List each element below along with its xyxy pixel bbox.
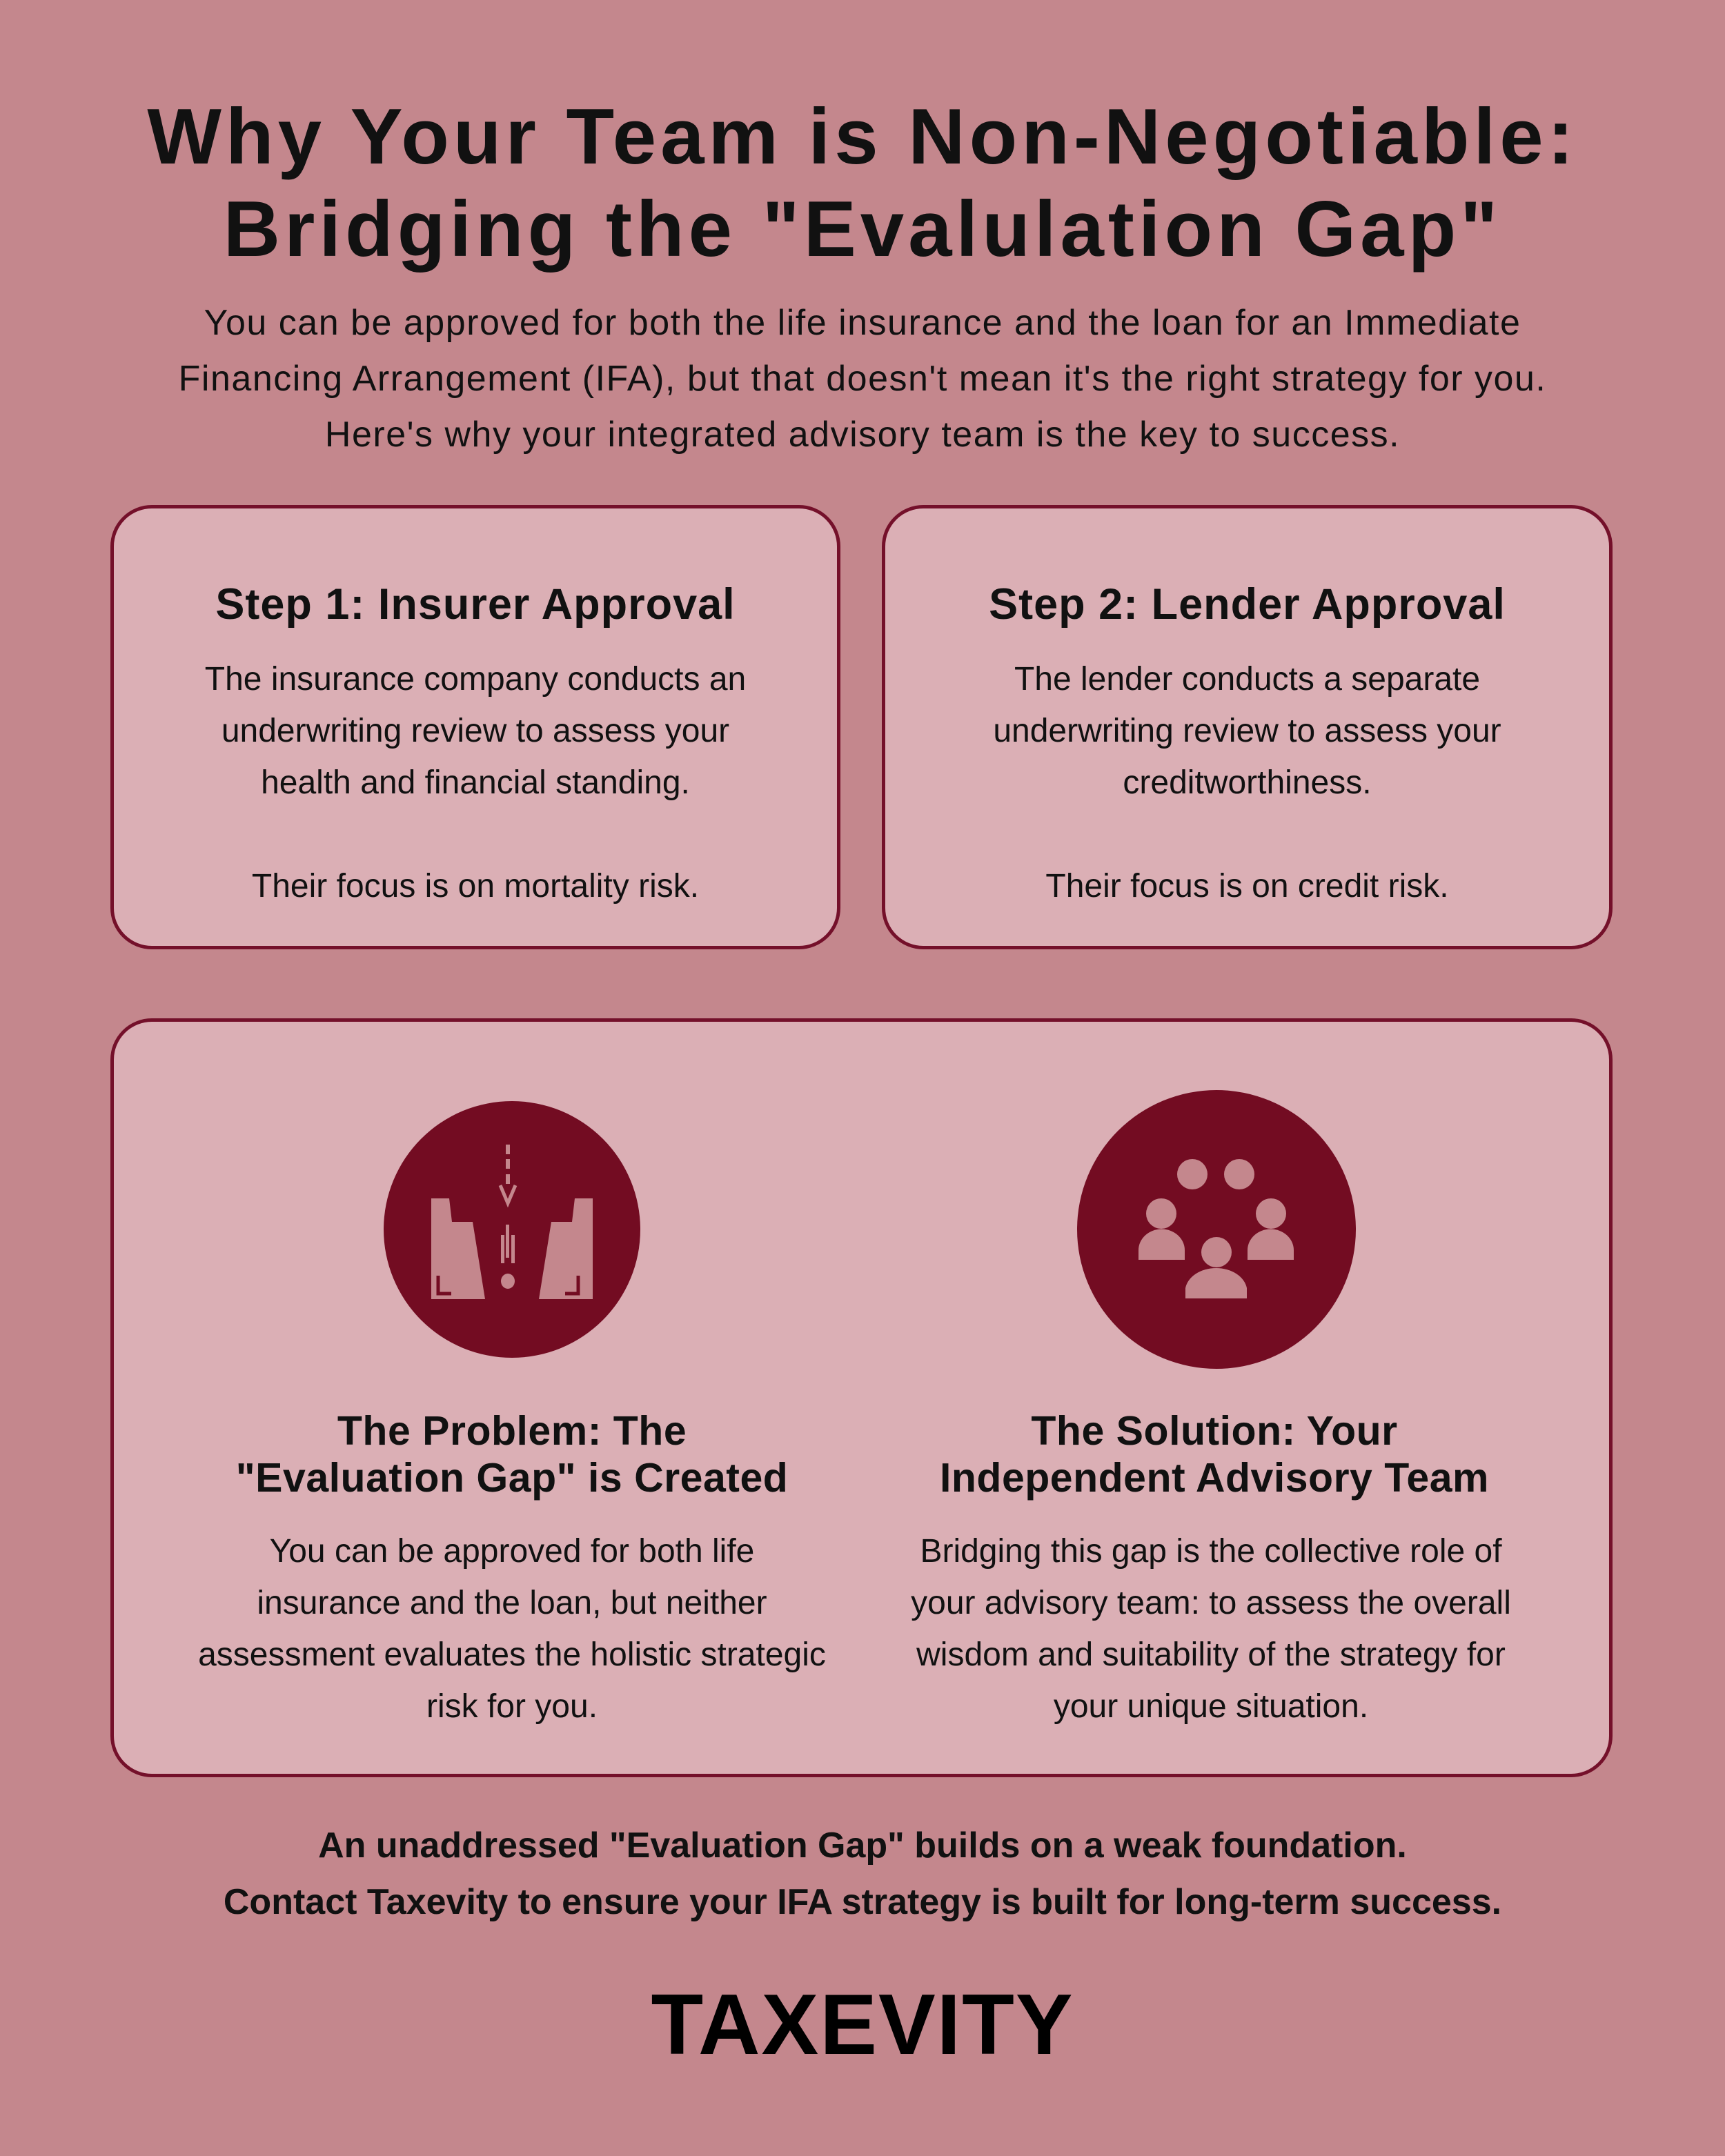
text: step 1 body: health and financial standing. xyxy=(261,764,690,801)
panel: step 2 xyxy=(882,505,1613,949)
call to action xyxy=(224,1826,1501,1922)
text: step 2 body: Their focus is on credit risk. xyxy=(1045,868,1449,904)
text: solution body: wisdom and suitability of the strategy for xyxy=(916,1636,1506,1673)
call to action: An unaddressed "Evaluation Gap" builds on a weak foundation. xyxy=(318,1826,1407,1866)
intro text: You can be approved for both the life insurance and the loan for an Immediate xyxy=(204,303,1521,343)
intro text: Here's why your integrated advisory team is the key to success. xyxy=(325,415,1400,455)
intro text xyxy=(179,303,1546,455)
heading: solution: The Solution: Your xyxy=(1031,1408,1398,1454)
heading: solution xyxy=(940,1408,1489,1501)
text: step 1 body xyxy=(205,661,746,904)
text: step 1 body: The insurance company conducts an xyxy=(205,661,746,698)
logo: TAXEVITY xyxy=(651,1977,1074,2073)
text: step 2 body: The lender conducts a separate xyxy=(1014,661,1480,698)
heading: problem: The Problem: The xyxy=(337,1408,687,1454)
text: solution body xyxy=(911,1533,1511,1725)
call to action: Contact Taxevity to ensure your IFA strategy is built for long-term success. xyxy=(224,1882,1501,1922)
text: problem body xyxy=(198,1533,826,1725)
title: Bridging the "Evalulation Gap" xyxy=(224,186,1501,273)
title: Why Your Team is Non-Negotiable: xyxy=(147,93,1578,181)
heading: step 1: Step 1: Insurer Approval xyxy=(215,580,736,629)
text: step 1 body: Their focus is on mortality risk. xyxy=(252,868,699,904)
text: problem body: You can be approved for both life xyxy=(270,1533,754,1570)
text: step 2 body xyxy=(993,661,1501,904)
text: solution body: your advisory team: to assess the overall xyxy=(911,1585,1511,1621)
heading: problem: "Evaluation Gap" is Created xyxy=(236,1455,788,1501)
intro text: Financing Arrangement (IFA), but that doesn't mean it's the right strategy for you. xyxy=(179,359,1546,399)
icon: evaluation gap xyxy=(384,1101,640,1358)
text: solution body: Bridging this gap is the collective role of xyxy=(920,1533,1502,1570)
heading: solution: Independent Advisory Team xyxy=(940,1455,1489,1501)
icon: advisory team xyxy=(1077,1090,1356,1369)
text: problem body: insurance and the loan, but neither xyxy=(257,1585,767,1621)
heading: problem xyxy=(236,1408,788,1501)
text: step 1 body: underwriting review to assess your xyxy=(221,713,729,749)
text: step 2 body: creditworthiness. xyxy=(1123,764,1372,801)
text: problem body: risk for you. xyxy=(426,1688,598,1725)
text: solution body: your unique situation. xyxy=(1054,1688,1368,1725)
text: step 2 body: underwriting review to assess your xyxy=(993,713,1501,749)
heading: step 2: Step 2: Lender Approval xyxy=(989,580,1506,629)
title xyxy=(147,93,1578,273)
text: problem body: assessment evaluates the holistic strategic xyxy=(198,1636,826,1673)
panel: step 1 xyxy=(110,505,840,949)
panel: problem and solution xyxy=(110,1018,1613,1777)
